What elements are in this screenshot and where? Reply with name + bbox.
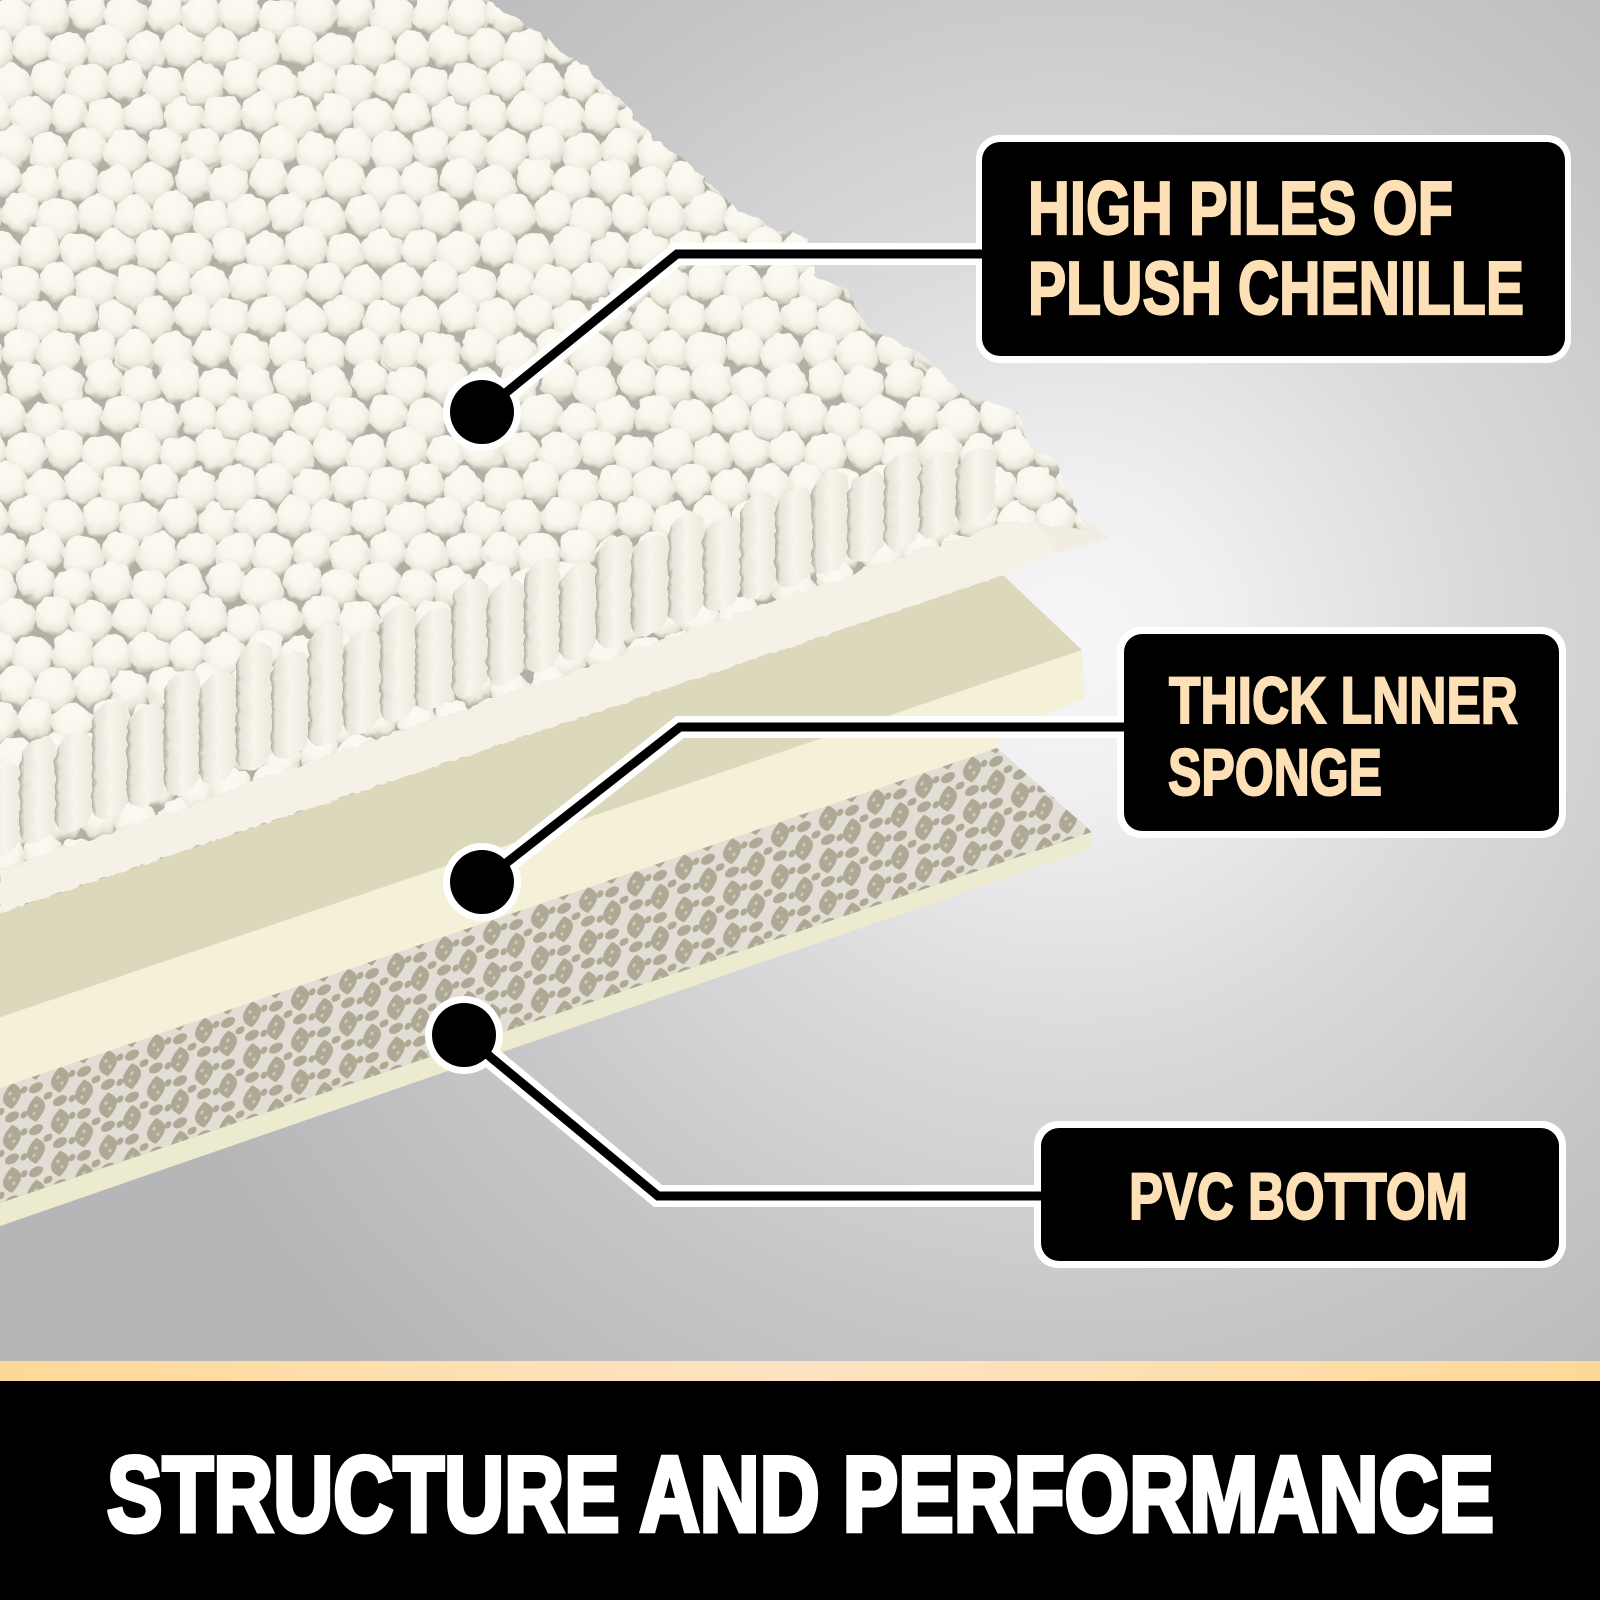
chenille top surface — [0, 0, 1090, 870]
callout: pvc bottom — [1034, 1121, 1566, 1268]
title banner — [0, 1381, 1600, 1600]
chenille fringe strands — [0, 390, 996, 861]
callout: thick inner sponge — [1117, 627, 1566, 838]
callout: high piles of plush chenille: HIGH PILES OF — [1028, 166, 1453, 250]
callout: thick inner sponge: SPONGE — [1168, 735, 1382, 809]
accent stripe — [0, 1361, 1600, 1381]
mat hem edge — [0, 500, 1111, 913]
leader line and dot: chenille — [443, 254, 982, 451]
layer: thick inner sponge — [0, 575, 1085, 1092]
leader line and dot: sponge — [443, 727, 1124, 921]
layer: chenille mat — [0, 0, 1110, 914]
callout: pvc bottom: PVC BOTTOM — [1129, 1159, 1468, 1233]
leader line and dot: pvc — [425, 996, 1041, 1196]
layer: PVC bottom net — [0, 748, 1092, 1226]
callout: high piles of plush chenille — [976, 135, 1571, 363]
